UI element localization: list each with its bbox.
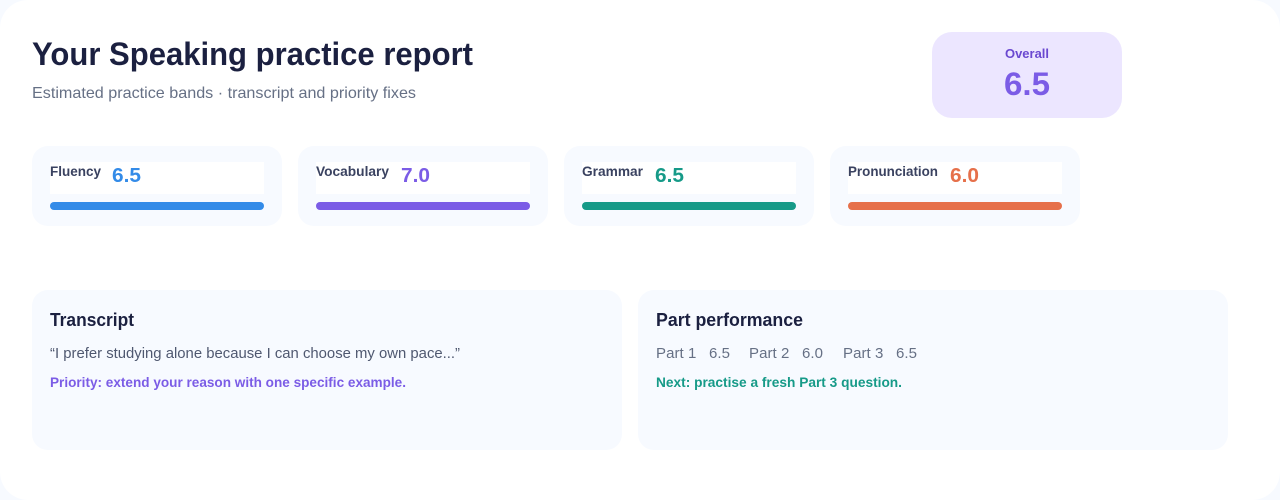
- overall score: 6.5: [1004, 66, 1050, 102]
- part performance heading: Part performance: [656, 310, 803, 330]
- fluency bar: [50, 202, 264, 210]
- vocabulary score: 7.0: [401, 165, 430, 187]
- pronunciation label: Pronunciation: [848, 163, 938, 179]
- grammar bar: [582, 202, 796, 210]
- overall score badge: [932, 32, 1122, 118]
- pronunciation score: 6.0: [950, 165, 979, 187]
- score card: grammar: [564, 146, 814, 226]
- panel: part performance: [638, 290, 1228, 450]
- grammar score: 6.5: [655, 165, 684, 187]
- fluency score: 6.5: [112, 165, 141, 187]
- panel: transcript: [32, 290, 622, 450]
- pronunciation bar: [848, 202, 1062, 210]
- part 3 score: Part 3 6.5: [843, 345, 917, 362]
- score card: pronunciation: [830, 146, 1080, 226]
- priority note: Priority: extend your reason with one specific example.: [50, 374, 406, 390]
- part 2 score: Part 2 6.0: [749, 345, 823, 362]
- grammar label: Grammar: [582, 163, 644, 179]
- transcript quote: “I prefer studying alone because I can choose my own pace...”: [50, 345, 460, 362]
- fluency label: Fluency: [50, 163, 101, 179]
- title: Your Speaking practice report: [32, 36, 473, 72]
- part 1 score: Part 1 6.5: [656, 345, 730, 362]
- subtitle: Estimated practice bands · transcript and priority fixes: [32, 85, 416, 102]
- next step note: Next: practise a fresh Part 3 question.: [656, 374, 902, 390]
- overall label: Overall: [1005, 46, 1049, 61]
- score card: vocabulary: [298, 146, 548, 226]
- vocabulary label: Vocabulary: [316, 163, 389, 179]
- score card: fluency: [32, 146, 282, 226]
- vocabulary bar: [316, 202, 530, 210]
- transcript heading: Transcript: [50, 310, 134, 330]
